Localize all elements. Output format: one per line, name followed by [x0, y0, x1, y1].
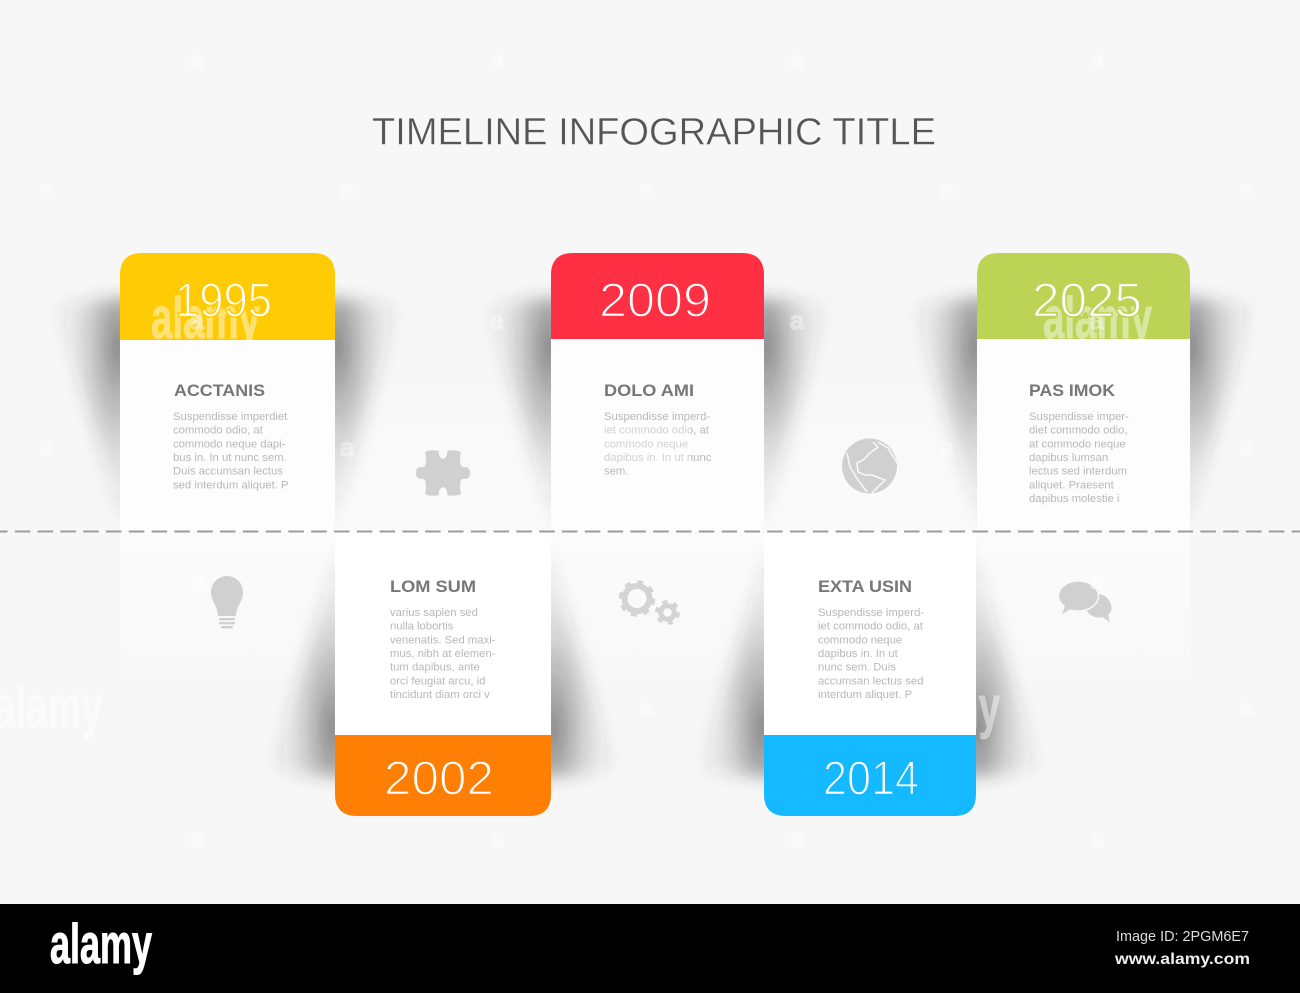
card 4 text: interdum aliquet. P: [818, 689, 912, 701]
card 4 text: dapibus in. In ut: [818, 648, 899, 660]
repeated small watermark marks: a: [790, 45, 805, 75]
card shadows: [54, 296, 1256, 779]
repeated small watermark marks: a: [340, 693, 355, 723]
repeated small watermark marks: a: [40, 432, 55, 462]
repeated small watermark marks: a: [190, 45, 205, 75]
title: TIMELINE INFOGRAPHIC TITLE: [372, 112, 936, 154]
repeated small watermark marks: a: [790, 565, 805, 595]
image id: Image ID: 2PGM6E7: [1116, 929, 1249, 945]
card 1 heading: ACCTANIS: [174, 382, 265, 400]
card 1 text: Duis accumsan lectus: [173, 466, 283, 478]
card 4 text: nunc sem. Duis: [818, 662, 896, 674]
card 1 body: [120, 339, 335, 531]
card 2 text: venenatis. Sed maxi-: [390, 634, 496, 646]
card 2 body: [335, 531, 551, 736]
card 3 text fade: [600, 424, 690, 466]
card 5 text: dapibus molestie i: [1029, 493, 1119, 505]
card 3 year: 2009: [599, 274, 711, 328]
icon: puzzle piece: [416, 450, 470, 496]
card 2 text: nulla lobortis: [390, 621, 454, 633]
background watermark: alamy: [891, 675, 1000, 740]
repeated small watermark marks: a: [1090, 565, 1105, 595]
icon: globe: [842, 438, 897, 494]
card 1 year tab: [120, 253, 335, 340]
repeated small watermark marks: a: [1090, 45, 1105, 75]
card 5 watermark: alamy: [1043, 286, 1152, 351]
card 3 heading: DOLO AMI: [604, 382, 694, 400]
card 2 year tab: [335, 735, 551, 816]
card 5 year tab: [977, 253, 1190, 339]
repeated small watermark marks: a: [340, 174, 355, 204]
background watermark: [0, 675, 1000, 740]
card 4 text: accumsan lectus sed: [818, 675, 924, 687]
card 2 text: tincidunt diam orci v: [390, 689, 490, 701]
card 4: 2014 Exta Usin: [764, 531, 976, 816]
card 2 text: tum dapibus, ante: [390, 662, 480, 674]
repeated small watermark marks: a: [490, 305, 505, 335]
card 3 text: [604, 411, 712, 478]
card 4 text: commodo neque: [818, 634, 902, 646]
card 2 year: 2002: [384, 752, 494, 806]
dashed timeline: [0, 530, 1300, 532]
card 3 body: [551, 339, 764, 531]
repeated small watermark marks: a: [190, 565, 205, 595]
card 5 text: at commodo neque: [1029, 438, 1126, 450]
card 2 text: mus, nibh at elemen-: [390, 648, 496, 660]
card 5 text: diet commodo odio,: [1029, 425, 1128, 437]
footer band: [0, 904, 1300, 993]
card 3 text: sem.: [604, 466, 628, 478]
repeated small watermark marks: a: [340, 432, 355, 462]
card 5 text: aliquet. Praesent: [1029, 479, 1115, 491]
repeated small watermark marks: a: [490, 565, 505, 595]
faint card extensions: [120, 385, 1190, 677]
card 4 heading: EXTA USIN: [818, 578, 912, 596]
footer logo: alamy: [50, 912, 152, 975]
card 1 watermark: alamy: [151, 286, 260, 351]
card 2 text: orci feugiat arcu, id: [390, 675, 485, 687]
card 2 text: [390, 607, 496, 701]
card 1 text: sed interdum aliquet. P: [173, 479, 289, 491]
card 2 heading: LOM SUM: [390, 578, 476, 596]
icon: light bulb: [211, 576, 243, 628]
card 1 year: 1995: [175, 274, 272, 328]
repeated small watermark marks: a: [940, 432, 955, 462]
website: www.alamy.com: [1114, 951, 1250, 968]
card 4 text: iet commodo odio, at: [818, 621, 924, 633]
card 2 text: varius sapien sed: [390, 607, 478, 619]
card 5: 2025 Pas Imok: [977, 253, 1190, 531]
repeated small watermark marks: a: [190, 823, 205, 853]
card 5 text: Suspendisse imper-: [1029, 411, 1129, 423]
card 3 text: Suspendisse imperd-: [604, 411, 710, 423]
icon: gears: [621, 582, 678, 623]
repeated small watermark marks: a: [1240, 432, 1255, 462]
card 3: 2009 Dolo Ami: [551, 253, 764, 531]
card 5 heading: PAS IMOK: [1029, 382, 1115, 400]
card 3 text: commodo neque: [604, 438, 688, 450]
card 4 text: [818, 607, 924, 701]
repeated small watermark marks: a: [1240, 174, 1255, 204]
card 4 body: [764, 531, 976, 736]
repeated small watermark marks: [40, 45, 1255, 853]
card 4 year tab: [764, 735, 976, 816]
card 5 text: [1029, 411, 1129, 505]
repeated small watermark marks: a: [1090, 823, 1105, 853]
card 1 text: [173, 411, 289, 491]
card 1 text: bus in. In ut nunc sem.: [173, 452, 287, 464]
repeated small watermark marks: a: [940, 174, 955, 204]
card 5 text: lectus sed interdum: [1029, 466, 1127, 478]
repeated small watermark marks: a: [790, 823, 805, 853]
card 5 text: dapibus lumsan: [1029, 452, 1108, 464]
card 4 text: Suspendisse imperd-: [818, 607, 924, 619]
repeated small watermark marks: a: [40, 174, 55, 204]
card 3 year tab: [551, 253, 764, 339]
card 1: 1995 Acctanis: [120, 253, 335, 531]
repeated small watermark marks: a: [1090, 305, 1105, 335]
card 2: 2002 Lom Sum: [335, 531, 551, 816]
card 4 year: 2014: [823, 752, 919, 806]
repeated small watermark marks: a: [1240, 693, 1255, 723]
card 3 text: iet commodo odio, at: [604, 425, 710, 437]
card 5 year: 2025: [1032, 274, 1142, 328]
icon: speech bubbles: [1058, 581, 1112, 622]
repeated small watermark marks: a: [490, 45, 505, 75]
repeated small watermark marks: a: [640, 174, 655, 204]
repeated small watermark marks: a: [640, 693, 655, 723]
card 1 text: commodo odio, at: [173, 425, 264, 437]
card 3 text: dapibus in. In ut nunc: [604, 452, 712, 464]
repeated small watermark marks: a: [490, 823, 505, 853]
card 1 text: Suspendisse imperdiet: [173, 411, 288, 423]
card 5 body: [977, 339, 1190, 531]
card 1 text: commodo neque dapi-: [173, 438, 286, 450]
repeated small watermark marks: a: [790, 305, 805, 335]
repeated small watermark marks: a: [190, 305, 205, 335]
